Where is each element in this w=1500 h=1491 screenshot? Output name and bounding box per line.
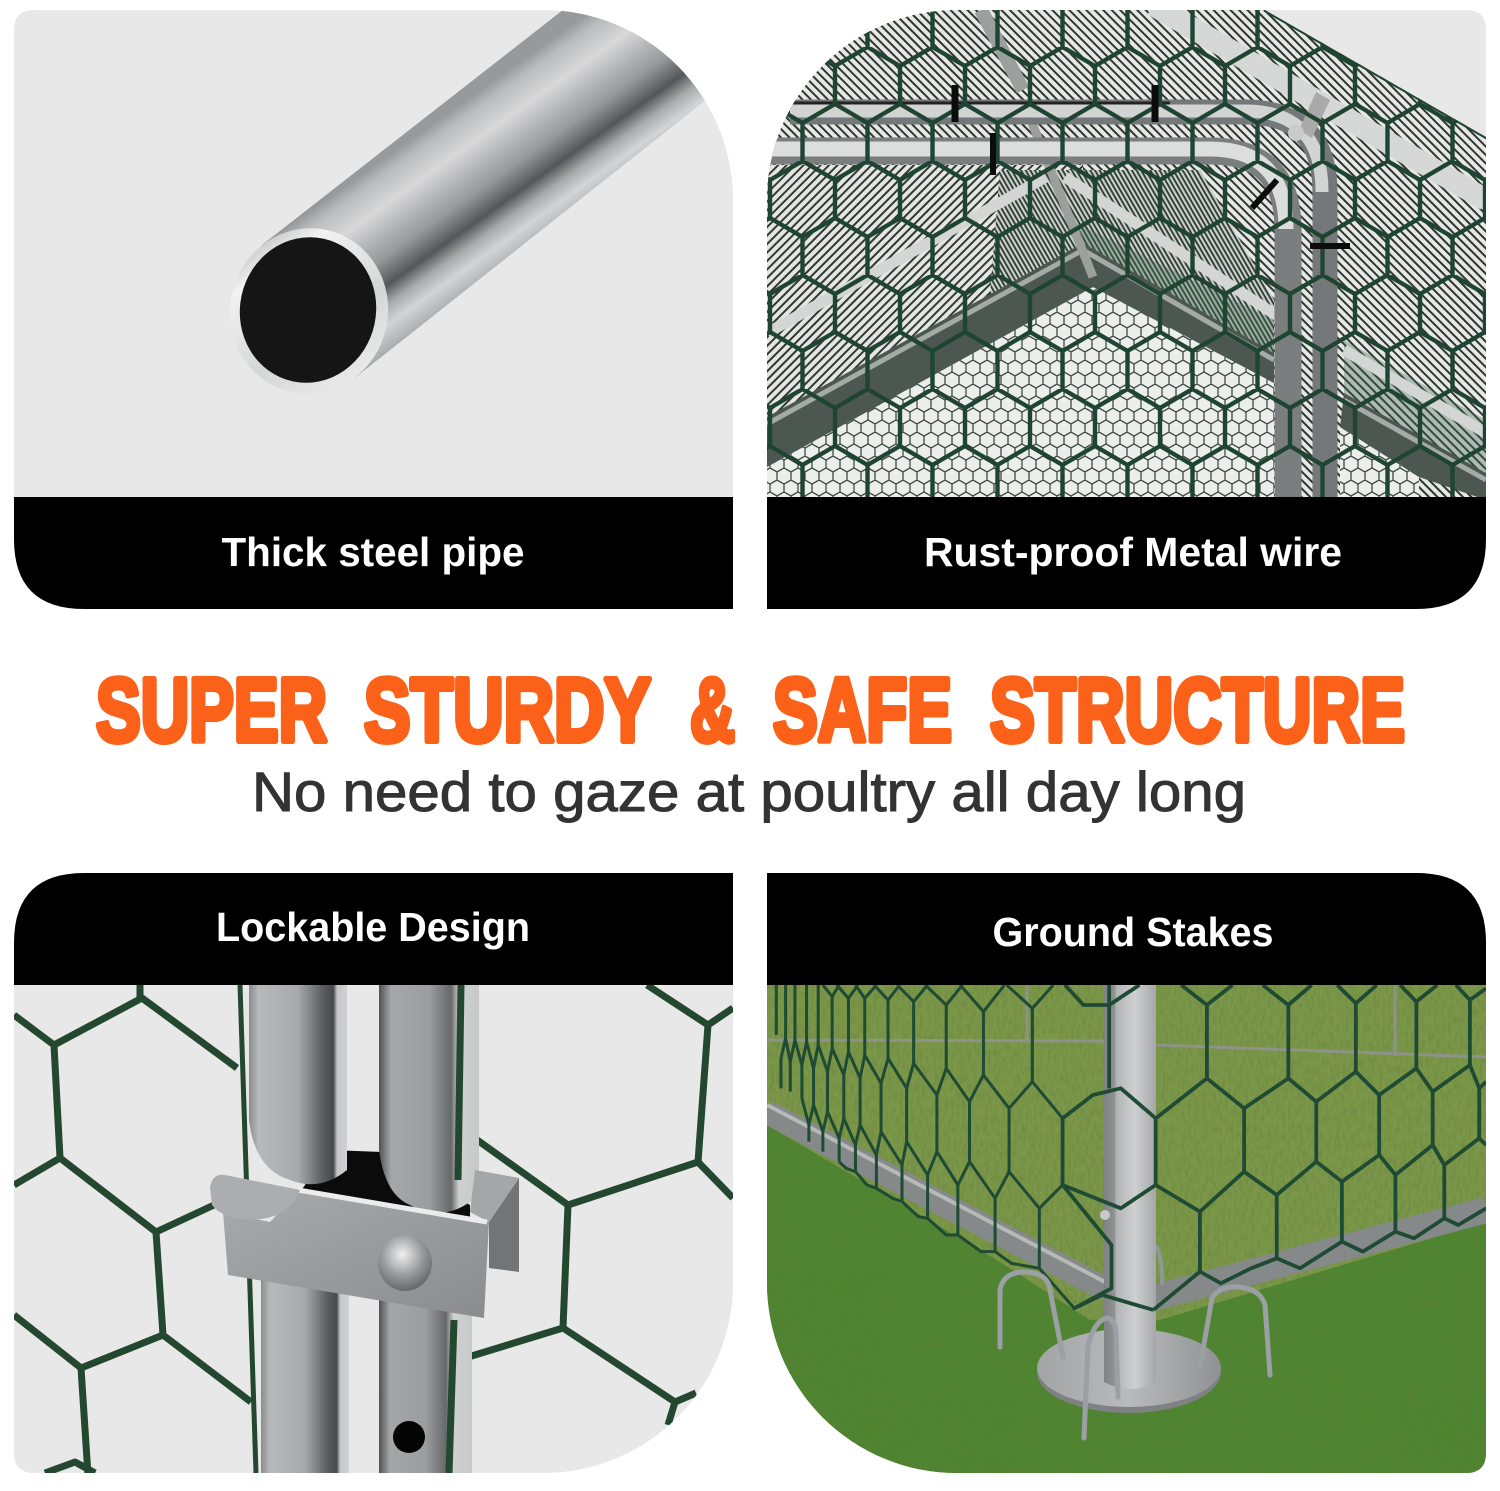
label band: lockable design	[14, 873, 733, 985]
wire mesh	[14, 985, 733, 1475]
panel: rust-proof metal wire	[767, 5, 1486, 609]
fence rails	[767, 1105, 1486, 1298]
label band: thick steel pipe: Thick steel pipe	[222, 529, 524, 575]
lawn	[767, 1125, 1486, 1473]
coop photo	[767, 5, 1486, 500]
roof hatching	[767, 10, 1486, 497]
base plate	[1037, 1369, 1221, 1413]
cable ties	[955, 85, 1350, 246]
title: STURDY	[364, 661, 651, 761]
subtitle: No need to gaze at poultry all day long	[252, 760, 1246, 823]
wire mesh	[767, 10, 1486, 497]
hinge	[1288, 92, 1330, 141]
lock hole	[393, 1421, 425, 1453]
label band: rust-proof metal wire: Rust-proof Metal wire	[924, 529, 1342, 575]
panel: ground stakes	[767, 873, 1486, 1473]
label band: thick steel pipe	[14, 497, 733, 609]
top edge wire	[1265, 10, 1486, 137]
label band: lockable design: Lockable Design	[216, 904, 530, 950]
title: &	[690, 661, 735, 761]
title: SAFE	[773, 661, 952, 761]
base plate top	[1037, 1329, 1221, 1407]
ground stakes	[1000, 1272, 1270, 1438]
label band: rust-proof metal wire	[767, 497, 1486, 609]
panel: lockable design	[14, 873, 733, 1475]
right door wire	[449, 985, 461, 1473]
title	[96, 661, 1405, 761]
distant fence	[767, 985, 1486, 1057]
post hinge bolt	[1100, 1210, 1110, 1220]
corner post	[1104, 985, 1156, 1389]
label band: ground stakes	[767, 873, 1486, 985]
back wall	[767, 287, 1419, 497]
gable beams	[767, 5, 1486, 500]
wire mesh	[776, 985, 1486, 1310]
latch backing shadow	[300, 1150, 470, 1218]
door pipes	[249, 985, 479, 1475]
back stake	[1156, 1245, 1162, 1285]
grass texture	[767, 985, 1486, 1473]
panel: thick steel pipe	[14, 0, 750, 609]
icon: steel pipe	[231, 10, 705, 391]
title: SUPER	[96, 661, 327, 761]
label band: ground stakes: Ground Stakes	[992, 909, 1274, 955]
latch	[210, 1170, 519, 1318]
frame pipes	[767, 103, 1325, 497]
